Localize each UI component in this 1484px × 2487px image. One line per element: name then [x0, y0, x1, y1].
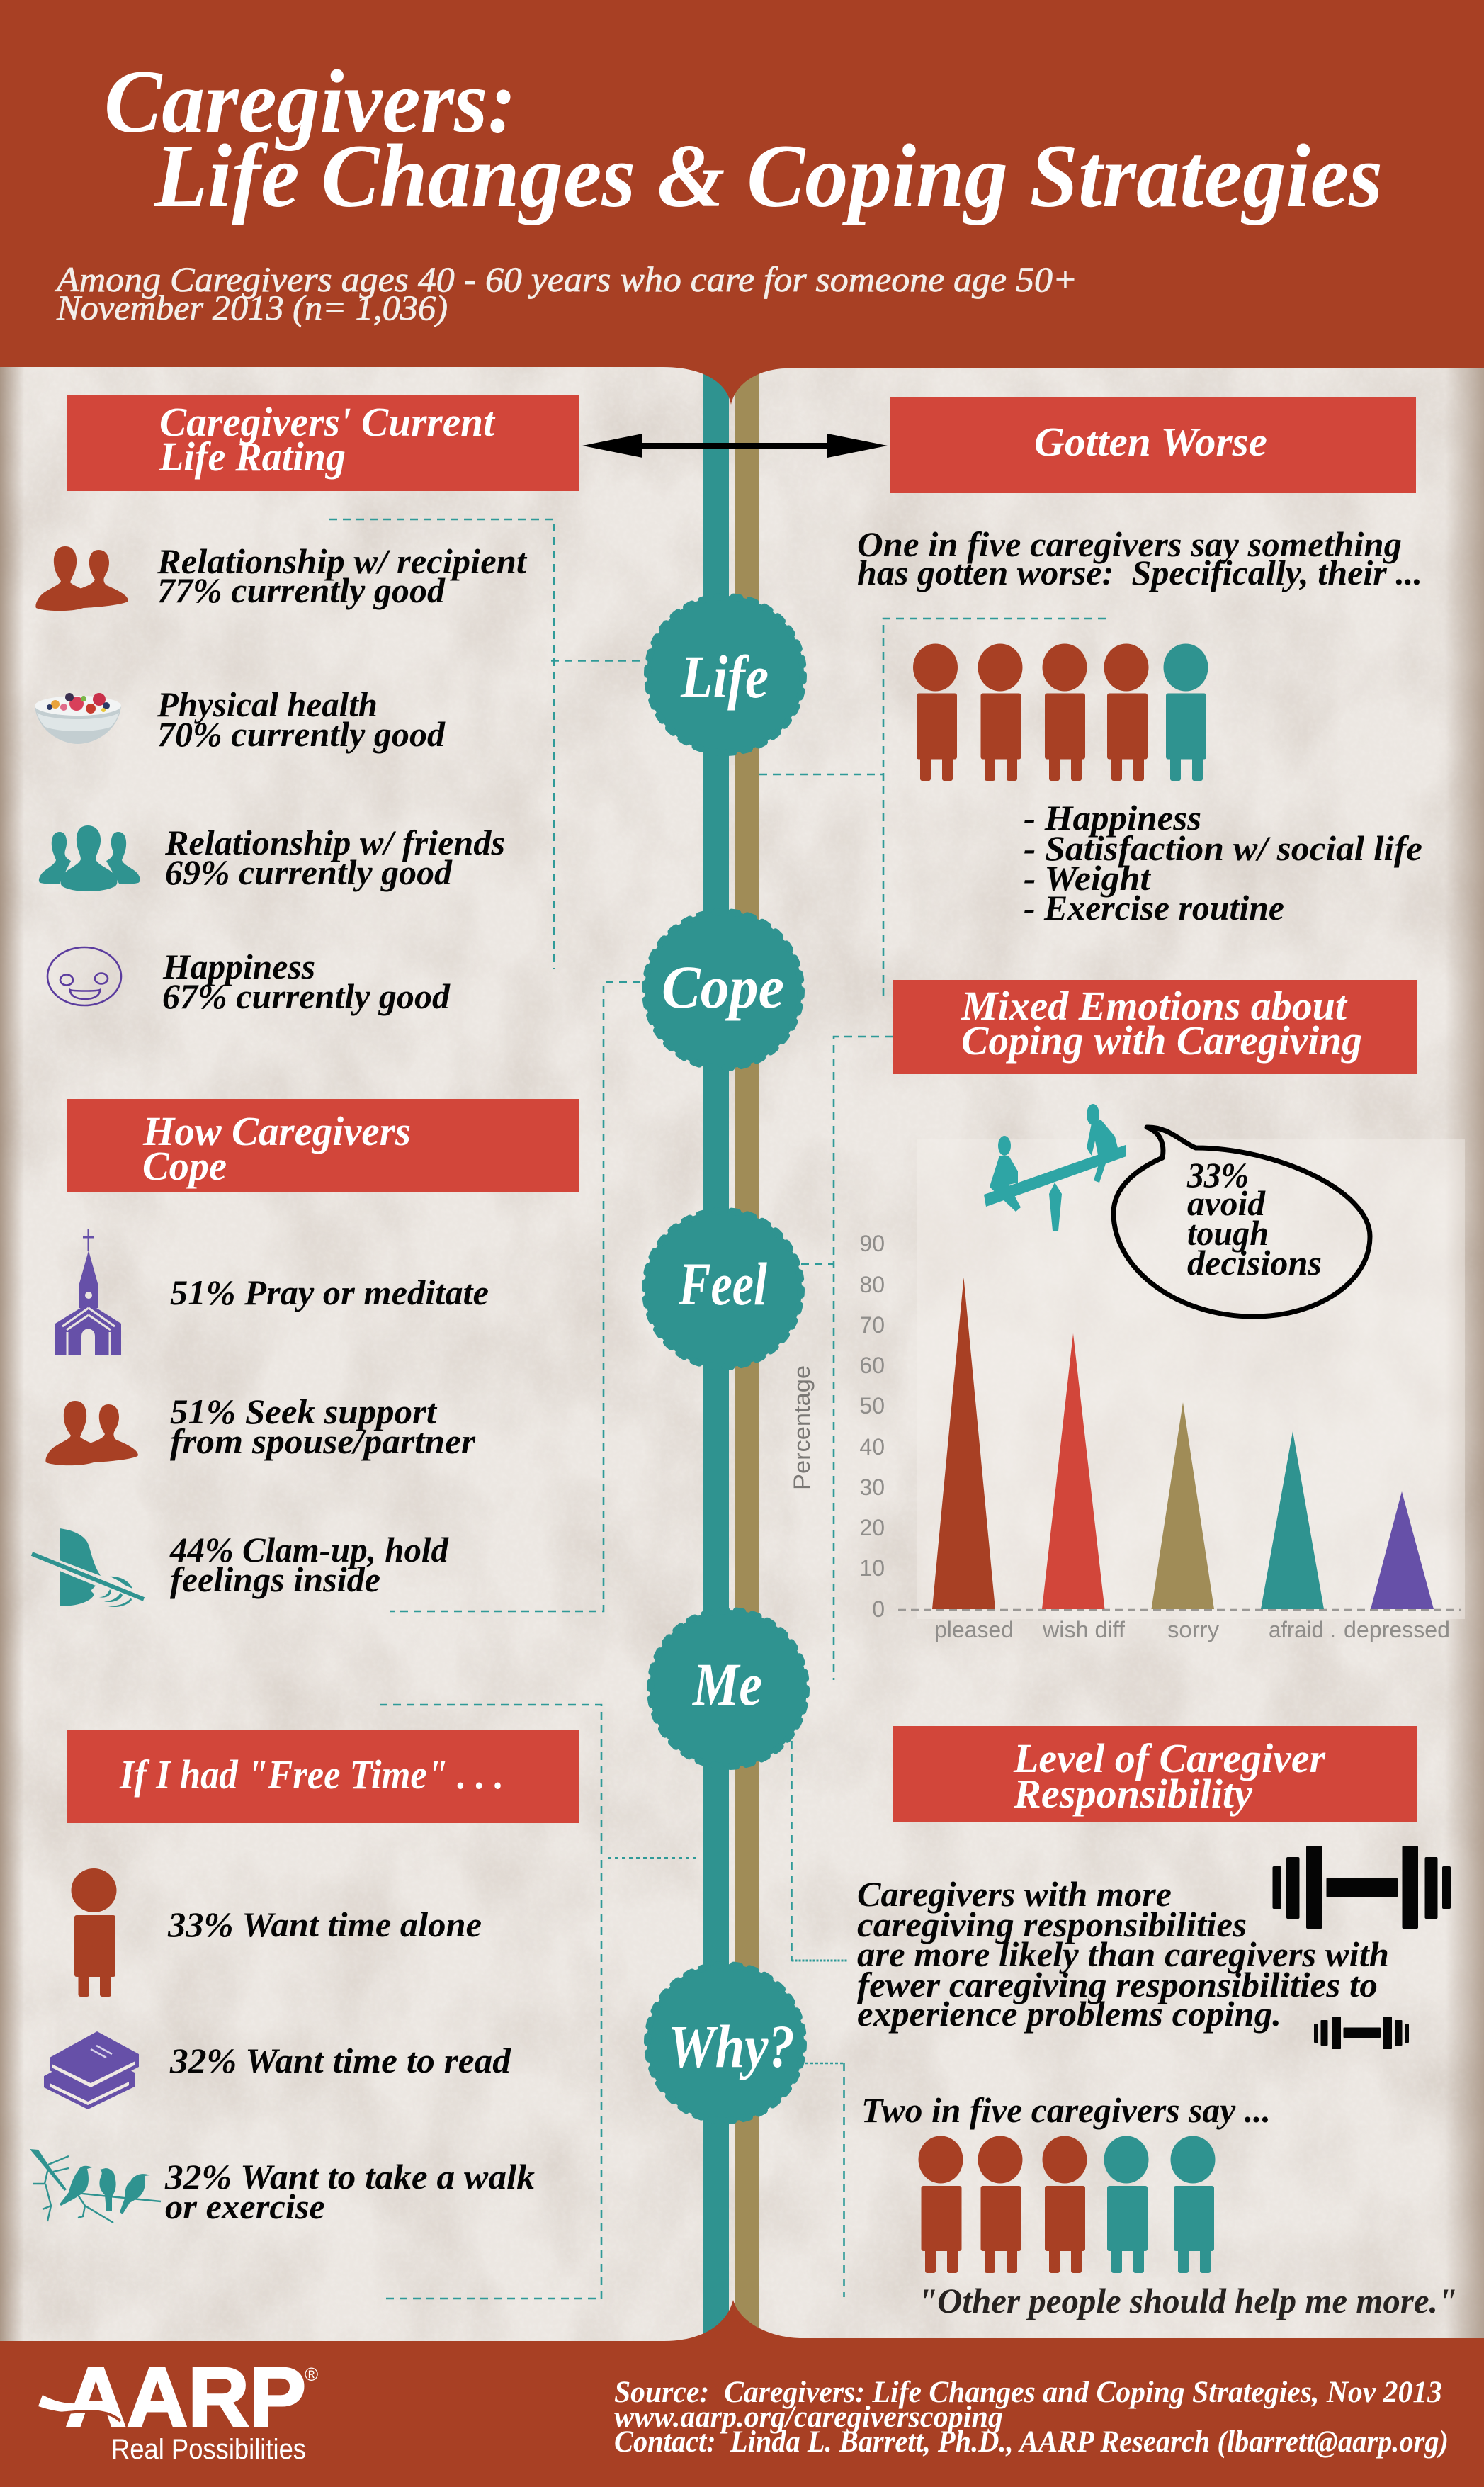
speech bubble [1114, 1127, 1370, 1316]
badge: Life [647, 596, 804, 753]
icon: five people, two in five [918, 2136, 1216, 2273]
bar: depressed [1371, 1491, 1434, 1609]
text: walk or exercise [164, 2157, 535, 2226]
badge: Why?: Why? [668, 2012, 795, 2080]
banner: Mixed Emotions: Coping with Caregiving [961, 1017, 1362, 1064]
header band [0, 0, 1484, 405]
text: caregiver responsibility [857, 1874, 1389, 2034]
subtitle: November 2013 (n= 1,036) [56, 288, 448, 327]
icon: smiley face [47, 947, 121, 1005]
bar: sorry [1152, 1402, 1214, 1609]
icon: person alone [71, 1868, 116, 1997]
text: one in five caregivers [857, 524, 1422, 592]
text: clam-up [169, 1530, 449, 1599]
text: relationship with friends [164, 823, 505, 892]
banner: Mixed Emotions: Mixed Emotions about [961, 983, 1348, 1029]
icon: seesaw [984, 1104, 1126, 1231]
text: happiness [162, 947, 451, 1016]
text: clam-up: feelings inside [170, 1560, 380, 1599]
icon: two people (relationship with recipient) [35, 546, 128, 611]
source and contact: www.aarp.org/caregiverscoping [614, 2401, 1003, 2434]
bar: wish diff [1042, 1333, 1105, 1609]
y-axis labels: 70 [859, 1312, 885, 1338]
text: one in five caregivers: One in five caregivers say something [857, 524, 1402, 564]
text: caregiver responsibility: caregiving responsibilities [857, 1905, 1247, 1944]
text: happiness: 67% currently good [162, 976, 451, 1016]
y-axis labels: 10 [859, 1555, 885, 1581]
text: time to read: 32% Want time to read [169, 2041, 511, 2080]
bar: afraid [1261, 1431, 1324, 1609]
text: relationship with friends: Relationship w/ friends [164, 823, 505, 862]
text: caregiver responsibility: are more likely than caregivers with [857, 1934, 1389, 1974]
list: what has gotten worse: - Weight [1024, 858, 1152, 898]
icon: silenced face [32, 1528, 144, 1607]
text: caregiver responsibility: experience problems coping. [857, 1994, 1281, 2034]
y-axis labels: 60 [859, 1353, 885, 1378]
icon: three people (friends) [39, 825, 140, 891]
badge: Cope: Cope [662, 953, 784, 1021]
quote: "Other people should help me more." [918, 2281, 1457, 2320]
list: what has gotten worse: - Satisfaction w/ social life [1024, 828, 1422, 868]
title [104, 52, 1383, 226]
banner: Gotten Worse: Gotten Worse [1034, 419, 1267, 465]
icon: large dumbbell [1272, 1846, 1451, 1929]
x-axis labels: sorry [1167, 1617, 1219, 1642]
logo: AARP: ® [305, 2364, 318, 2385]
y-axis labels: 50 [859, 1393, 885, 1419]
y-axis labels: 40 [859, 1434, 885, 1460]
text: seek support [170, 1392, 476, 1461]
x-axis labels: afraid . [1269, 1617, 1336, 1642]
icon: two people (spouse) [45, 1401, 138, 1465]
x-axis labels: pleased [934, 1617, 1014, 1642]
spine: teal and tan bars [703, 354, 759, 2352]
text: walk or exercise: or exercise [165, 2187, 325, 2226]
bar: pleased [932, 1278, 995, 1609]
speech bubble: avoid [1187, 1183, 1266, 1223]
badge: Feel: Feel [678, 1250, 767, 1318]
y-axis title: Percentage [789, 1365, 815, 1490]
badge: Me: Me [691, 1650, 762, 1718]
subtitle: Among Caregivers ages 40 - 60 years who care for someone age 50+ [55, 259, 1077, 299]
text: relationship with recipient [157, 541, 528, 610]
double-headed arrow [582, 434, 888, 458]
text: physical health: Physical health [157, 684, 378, 724]
text: happiness: Happiness [162, 947, 315, 986]
icon: small dumbbell [1314, 2017, 1409, 2049]
y-axis labels: 0 [872, 1596, 885, 1622]
banner: How Caregivers Cope: Cope [142, 1143, 227, 1189]
title: Life Changes & Coping Strategies [154, 127, 1383, 226]
badge: Me [650, 1610, 807, 1767]
y-axis labels: 30 [859, 1474, 885, 1500]
icon: birds on branch [30, 2149, 161, 2223]
text: walk or exercise: 32% Want to take a walk [164, 2157, 535, 2196]
text: caregiver responsibility: fewer caregiving responsibilities to [857, 1965, 1378, 2004]
source and contact: Source: Caregivers: Life Changes and Coping Strategies, Nov 2013 [614, 2376, 1442, 2409]
banner: Mixed Emotions [893, 980, 1417, 1074]
icon: five people, one in five [913, 643, 1208, 781]
x-axis labels [934, 1617, 1450, 1642]
subtitle [55, 259, 1077, 327]
x-axis labels: depressed [1344, 1617, 1450, 1642]
banner: Caregivers' Current Life Rating: Life Rating [159, 434, 346, 480]
banner: Level of Caregiver Responsibility [893, 1726, 1417, 1822]
x-axis labels: wish diff [1042, 1617, 1125, 1642]
banner: If I had Free Time [67, 1730, 579, 1823]
logo: AARP: Real Possibilities [111, 2434, 306, 2465]
icon: cereal bowl [35, 693, 121, 744]
text: one in five caregivers: has gotten worse: Specifically, their ... [857, 553, 1422, 592]
banner: If I had Free Time: If I had "Free Time" . . . [119, 1752, 504, 1798]
speech bubble: tough [1187, 1213, 1269, 1253]
footer band [0, 2300, 1484, 2487]
icon: church [55, 1229, 121, 1355]
speech bubble: decisions [1187, 1243, 1322, 1282]
title: Caregivers: [104, 52, 516, 152]
source and contact: Contact: Linda L. Barrett, Ph.D., AARP Research (lbarrett@aarp.org) [614, 2425, 1449, 2459]
y-axis labels: 20 [859, 1515, 885, 1540]
badge: Feel [645, 1210, 802, 1367]
text: relationship with recipient: Relationship w/ recipient [157, 541, 528, 581]
badge: Why? [647, 1964, 804, 2121]
text: relationship with friends: 69% currently good [165, 852, 453, 892]
banner: How Caregivers Cope [67, 1099, 579, 1192]
badge: Life: Life [680, 643, 769, 711]
banner: Level of Caregiver Responsibility: Responsibility [1013, 1771, 1252, 1817]
y-axis labels: 80 [859, 1272, 885, 1297]
text: physical health [157, 684, 446, 754]
speech bubble: 33% [1186, 1155, 1249, 1195]
connector lines [329, 519, 1106, 2299]
chart: mixed emotions triangles [789, 1139, 1465, 1642]
y-axis labels [859, 1231, 885, 1622]
list: what has gotten worse: - Exercise routine [1024, 888, 1284, 927]
text: relationship with recipient: 77% currently good [157, 570, 446, 610]
y-axis labels: 90 [859, 1231, 885, 1256]
badge: Cope [645, 911, 802, 1068]
list: what has gotten worse: - Happiness [1024, 798, 1201, 838]
text: pray or meditate: 51% Pray or meditate [170, 1273, 489, 1312]
list: what has gotten worse [1024, 798, 1422, 927]
banner: How Caregivers Cope: How Caregivers [142, 1108, 411, 1154]
text: time alone: 33% Want time alone [167, 1905, 482, 1944]
source and contact [614, 2376, 1449, 2459]
text: caregiver responsibility: Caregivers with more [857, 1874, 1172, 1914]
icon: books [44, 2031, 139, 2109]
text: seek support: from spouse/partner [170, 1421, 476, 1461]
banner: Caregivers' Current Life Rating: Caregivers' Current [159, 399, 496, 445]
text: clam-up: 44% Clam-up, hold [169, 1530, 449, 1569]
banner: Caregivers' Current Life Rating [67, 395, 579, 491]
banner: Gotten Worse [890, 397, 1416, 493]
logo: AARP: AARP [65, 2350, 306, 2444]
text: two in five: Two in five caregivers say ... [861, 2090, 1271, 2130]
banner: Level of Caregiver Responsibility: Level of Caregiver [1013, 1735, 1325, 1781]
text: seek support: 51% Seek support [170, 1392, 438, 1431]
text: physical health: 70% currently good [157, 714, 446, 754]
